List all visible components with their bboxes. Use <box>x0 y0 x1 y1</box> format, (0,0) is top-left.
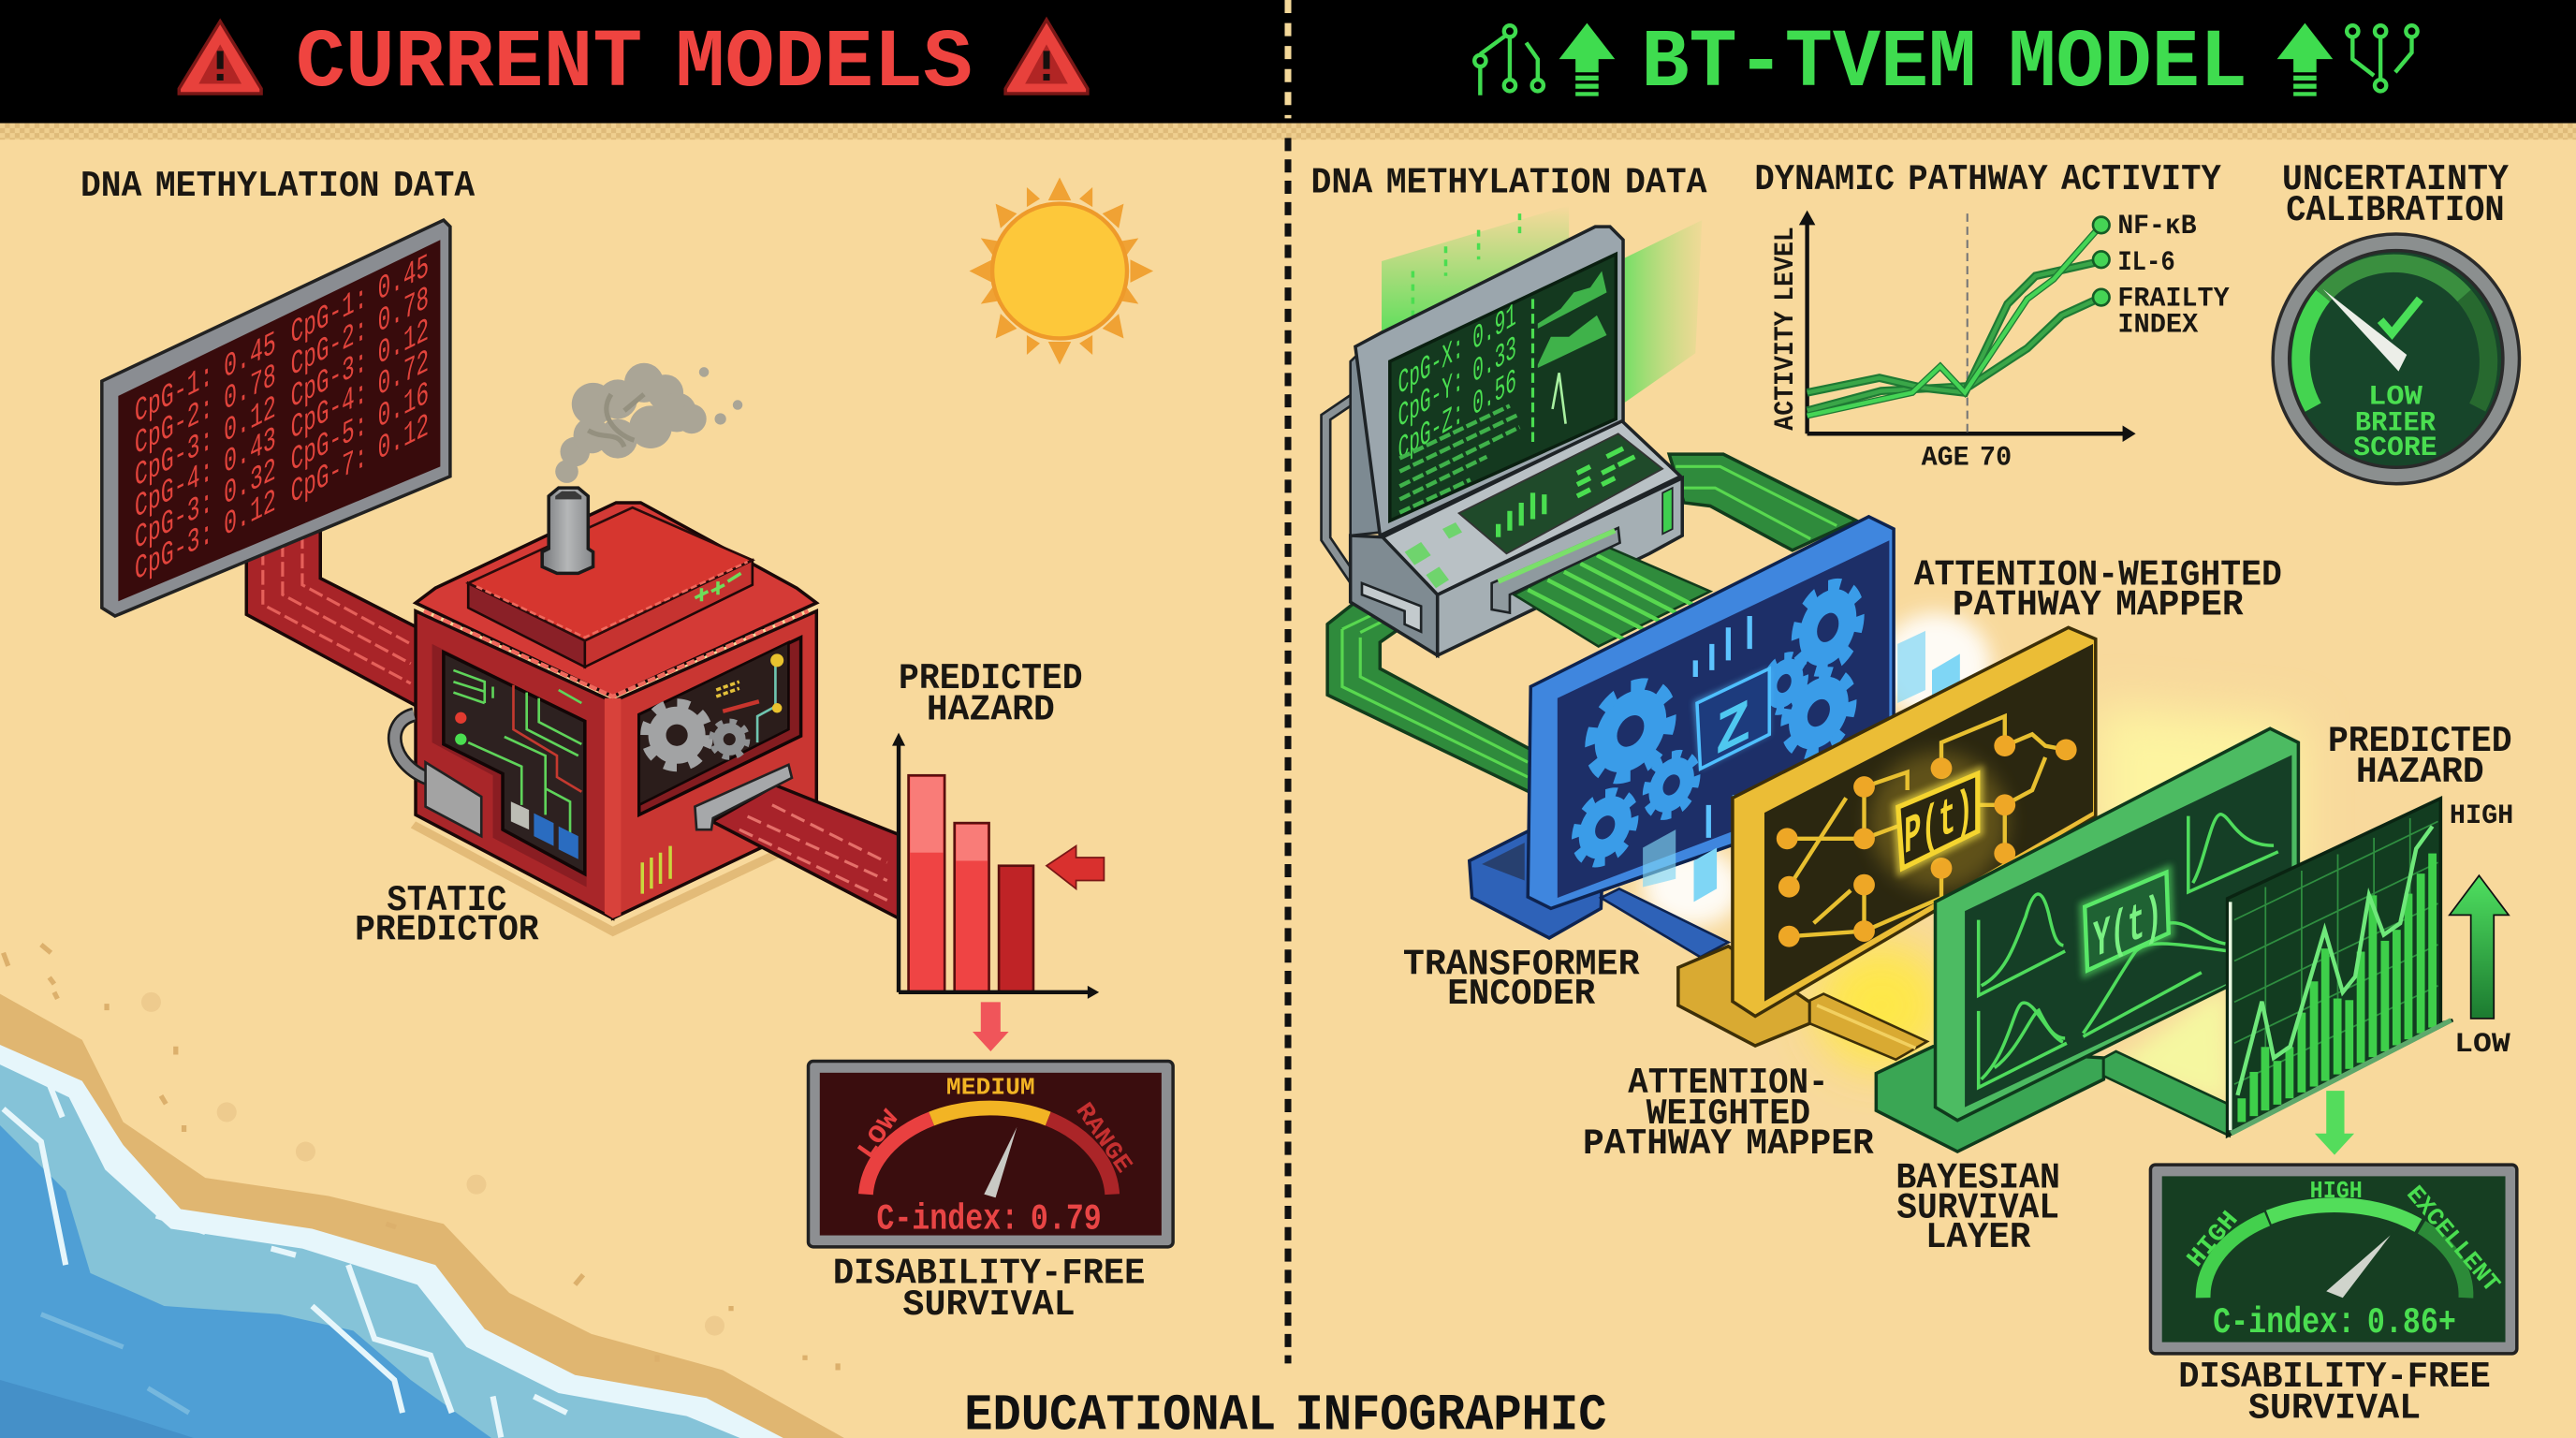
label: transformer encoder: TRANSFORMER <box>1403 945 1640 986</box>
connector: yellow <box>1809 994 1927 1060</box>
workstation deck <box>1383 420 1680 594</box>
chart: predicted hazard bars <box>892 733 1099 999</box>
monitor screen <box>1390 254 1616 521</box>
label: predicted hazard left: PREDICTED <box>899 658 1083 699</box>
label: attention-weighted top <box>1914 555 2282 625</box>
distribution curves <box>1979 814 2278 1088</box>
machine shadow <box>411 821 822 936</box>
label: transformer encoder <box>1403 945 1640 1015</box>
panel: bayesian survival layer <box>1876 728 2298 1152</box>
methylation values: CpG-7: 0.12 <box>291 407 429 513</box>
icon: circuit left <box>1474 25 1544 95</box>
label: uncertainty calibration: CALIBRATION <box>2286 190 2505 231</box>
glow: behind chart <box>2111 986 2230 1104</box>
encoder frame <box>1528 517 1894 908</box>
icon: static predictor machine <box>395 488 822 936</box>
glow: yellow <box>2097 707 2300 888</box>
chart: dynamic pathway activity: NF-κB <box>2117 210 2197 242</box>
label: predicted hazard right: PREDICTED <box>2328 721 2512 762</box>
label: attention mapper lower: WEIGHTED <box>1647 1093 1810 1135</box>
label: transformer encoder: ENCODER <box>1447 974 1596 1015</box>
chart: dynamic pathway activity: AGE 70 <box>1922 442 2012 474</box>
left connector <box>1362 583 1421 632</box>
label: low: LOW <box>2454 1028 2510 1060</box>
screen readings <box>1398 297 1516 470</box>
pathway graph: P(t) <box>1904 779 1973 870</box>
status strip <box>1662 488 1673 534</box>
gauge: uncertainty calibration dial: BRIER <box>2355 407 2436 439</box>
screen readings: CpG-Y: 0.33 <box>1398 330 1516 437</box>
pipe: screen to machine <box>246 514 417 707</box>
label: DNA methylation right: DNA METHYLATION DATA <box>1311 162 1707 203</box>
chart: dynamic pathway activity <box>1769 210 2230 474</box>
survival base <box>1876 1047 2103 1152</box>
label: bayesian survival layer: SURVIVAL <box>1896 1187 2059 1228</box>
label: attention mapper lower: ATTENTION- <box>1628 1063 1828 1104</box>
panel: transformer encoder <box>1470 517 1894 938</box>
label: static predictor <box>355 880 539 951</box>
glow: white blue <box>1880 613 1991 718</box>
methylation values: CpG-1: 0.45 <box>291 248 429 354</box>
connector: blue <box>1601 888 1728 957</box>
pipe: machine to chart <box>695 765 899 918</box>
beach and ocean <box>0 945 846 1438</box>
ribbon connector <box>1492 528 1620 613</box>
chart: predicted hazard right <box>2228 799 2452 1136</box>
chart: dynamic pathway activity: IL-6 <box>2117 246 2175 278</box>
encoder base <box>1470 831 1602 938</box>
methylation values: CpG-5: 0.16 <box>291 375 429 481</box>
icon: warning right <box>1005 20 1088 94</box>
methylation values: CpG-3: 0.12 <box>135 389 276 497</box>
hazard bars <box>909 775 1033 992</box>
glow: yellow lower <box>1815 943 1947 1068</box>
methylation values: CpG-3: 0.12 <box>135 483 276 591</box>
panel: c-index gauge left: LOW <box>852 1105 905 1165</box>
label: dynamic pathway: DYNAMIC PATHWAY ACTIVITY <box>1754 159 2222 200</box>
arrow: down to gauge <box>973 1002 1009 1051</box>
icon: sun <box>970 178 1153 365</box>
label: predicted hazard right <box>2328 721 2512 793</box>
label: disability-free right: DISABILITY-FREE <box>2178 1357 2491 1398</box>
label: high: HIGH <box>2450 800 2513 831</box>
gears <box>1576 575 1859 871</box>
label: bayesian survival layer: LAYER <box>1925 1217 2031 1258</box>
chart: dynamic pathway activity: FRAILTY <box>2117 282 2230 314</box>
socket and cable <box>395 714 481 836</box>
icon: warning left <box>179 22 261 94</box>
methylation values: CpG-2: 0.78 <box>291 280 429 386</box>
center divider <box>1286 0 1290 1363</box>
line: NF-kB <box>1808 225 2101 416</box>
keypad screen <box>1459 433 1662 553</box>
mapper base <box>1678 946 1809 1046</box>
panel: methylation screen left <box>102 220 450 616</box>
circuit panel <box>432 644 587 888</box>
glow above right screen <box>1382 205 1702 403</box>
heading: current models: CURRENT MODELS <box>296 18 973 110</box>
label: predicted hazard right: HAZARD <box>2356 752 2484 793</box>
label: attention mapper lower: PATHWAY MAPPER <box>1583 1123 1875 1165</box>
survival frame <box>1936 728 2298 1121</box>
screen readings: CpG-X: 0.91 <box>1398 297 1516 404</box>
gear screen <box>639 638 801 814</box>
label: disability-free left <box>833 1253 1145 1326</box>
label: disability-free right: SURVIVAL <box>2248 1387 2421 1429</box>
chart: dynamic pathway activity: ACTIVITY LEVEL <box>1769 227 1801 431</box>
data cards <box>1643 631 1960 902</box>
glow: blue lower <box>1643 847 1741 927</box>
label: bayesian survival layer: BAYESIAN <box>1895 1158 2060 1199</box>
methylation values: CpG-4: 0.72 <box>291 344 429 449</box>
label: bayesian survival layer <box>1895 1158 2060 1258</box>
label: disability-free left: DISABILITY-FREE <box>833 1253 1145 1294</box>
label: predicted hazard left <box>899 658 1083 731</box>
icon: up arrow right <box>2277 23 2333 96</box>
label: static predictor: PREDICTOR <box>355 910 539 951</box>
gauge: uncertainty calibration dial: SCORE <box>2353 432 2437 463</box>
label: DNA methylation left: DNA METHYLATION DATA <box>80 166 476 207</box>
label: uncertainty calibration: UNCERTAINTY <box>2282 159 2510 200</box>
pathway graph <box>1777 716 2077 947</box>
machine left face <box>416 611 613 918</box>
pipe: left loop green <box>1327 602 1536 795</box>
arrow: low to high <box>2450 875 2509 1019</box>
Z box <box>1694 668 1769 773</box>
gauge: uncertainty calibration dial <box>2273 234 2519 484</box>
smoke <box>555 363 742 483</box>
methylation values: CpG-4: 0.43 <box>135 420 276 528</box>
machine top face <box>416 503 816 697</box>
panel: c-index gauge left <box>809 1062 1173 1247</box>
label: uncertainty calibration <box>2282 159 2510 231</box>
header bar <box>0 0 2576 124</box>
ribbon: center green <box>1515 547 1710 646</box>
heading: BT-TVEM model: BT-TVEM MODEL <box>1641 18 2247 110</box>
Z box: Z <box>1716 688 1751 773</box>
checker strip under header <box>0 124 2576 139</box>
panel: c-index gauge right: EXCELLENT <box>2400 1181 2506 1299</box>
label: predicted hazard left: HAZARD <box>927 690 1055 731</box>
panel: pathway mapper <box>1678 627 2096 1046</box>
workstation lower body <box>1351 536 1438 655</box>
panel: c-index gauge right: C-index: 0.86+ <box>2213 1302 2456 1343</box>
methylation values: CpG-3: 0.32 <box>135 451 276 559</box>
methylation values <box>135 248 429 591</box>
label: attention mapper lower <box>1583 1063 1875 1165</box>
Y(t) box: Y(t) <box>2093 885 2162 974</box>
side cable <box>1325 399 1354 580</box>
grid <box>2234 818 2438 1101</box>
green blobs on deck <box>1405 522 1462 588</box>
panel: c-index gauge right: HIGH <box>2182 1206 2245 1273</box>
panel: c-index gauge right: HIGH <box>2310 1177 2363 1205</box>
arrow: hazard marker <box>1046 846 1104 888</box>
monitor frame <box>1355 227 1623 536</box>
survival screen <box>1965 755 2291 1108</box>
machine right face <box>613 611 816 918</box>
mapper frame <box>1733 627 2096 1016</box>
methylation values: CpG-2: 0.78 <box>135 357 276 464</box>
label: static predictor: STATIC <box>387 880 506 921</box>
line: IL-6 <box>1808 261 2101 392</box>
Y(t) box <box>2085 873 2169 974</box>
encoder screen <box>1558 540 1889 898</box>
lid <box>468 507 753 667</box>
label: attention-weighted top: PATHWAY MAPPER <box>1953 584 2244 625</box>
label: disability-free left: SURVIVAL <box>902 1284 1076 1326</box>
screen readings: CpG-Z: 0.56 <box>1398 362 1516 470</box>
icon: methylation workstation <box>1325 227 1710 655</box>
chart: dynamic pathway activity: INDEX <box>2117 308 2198 340</box>
pipe: top right green <box>1669 454 1856 550</box>
label: attention-weighted top: ATTENTION-WEIGHTED <box>1914 555 2282 596</box>
vent stripes <box>642 846 670 894</box>
bars <box>2237 854 2437 1122</box>
panel: c-index gauge left: C-index: 0.79 <box>876 1199 1102 1240</box>
panel: c-index gauge left: MEDIUM <box>946 1074 1035 1102</box>
panel: c-index gauge right <box>2150 1165 2517 1354</box>
gauge: uncertainty calibration dial: LOW <box>2368 381 2422 413</box>
methylation values: CpG-3: 0.12 <box>291 312 429 418</box>
monitor side <box>1351 333 1380 536</box>
mapper screen <box>1764 644 2093 1002</box>
methylation values: CpG-1: 0.45 <box>135 325 276 433</box>
icon: circuit right <box>2347 25 2418 91</box>
chimney <box>542 488 593 573</box>
line: frailty index <box>1808 298 2101 411</box>
panel: c-index gauge left: RANGE <box>1070 1097 1137 1179</box>
icon: up arrow left <box>1559 23 1615 96</box>
label: disability-free right <box>2178 1357 2491 1429</box>
connector: green <box>2103 1051 2230 1136</box>
arrow: green down <box>2315 1091 2354 1155</box>
